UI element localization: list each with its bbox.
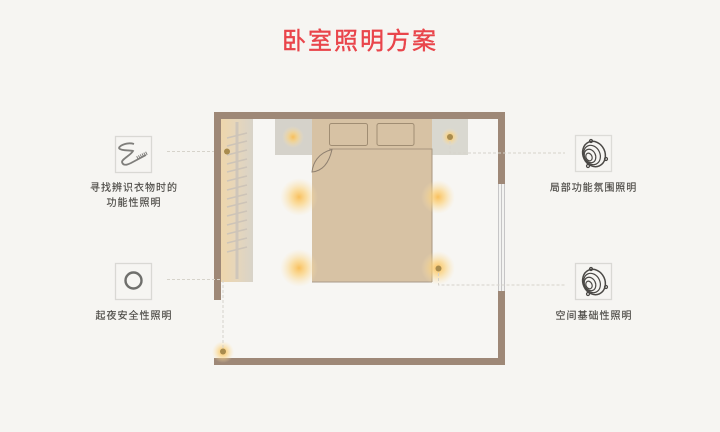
- title: 卧室照明方案: [282, 28, 438, 55]
- lights: glows: [212, 126, 459, 363]
- floor plan: [212, 112, 505, 365]
- icon: hanging light strip: [116, 136, 152, 172]
- label: wardrobe lighting: 寻找辨识衣物时的: [90, 181, 178, 194]
- icon: ring light: [116, 264, 152, 300]
- leader lines: [167, 141, 565, 348]
- lights: fixtures: [220, 134, 453, 354]
- icon: spotlight, general: [576, 264, 612, 300]
- nightstand: right: [432, 119, 468, 155]
- label: night safety lighting: 起夜安全性照明: [96, 309, 172, 322]
- blanket fold: [312, 150, 332, 172]
- walls: [214, 112, 505, 365]
- nightstand: left: [275, 119, 312, 155]
- label: general lighting: 空间基础性照明: [556, 309, 632, 322]
- label: wardrobe lighting: 功能性照明: [106, 196, 162, 209]
- label: wardrobe lighting: [90, 181, 178, 209]
- window: [498, 184, 505, 291]
- label: local ambient lighting: 局部功能氛围照明: [550, 181, 637, 194]
- pillow: left: [330, 124, 368, 146]
- pillow: right: [377, 124, 414, 146]
- room floor: [221, 119, 498, 358]
- icon: spotlight, local: [576, 136, 612, 172]
- bed: [312, 119, 432, 282]
- wardrobe: [221, 119, 253, 282]
